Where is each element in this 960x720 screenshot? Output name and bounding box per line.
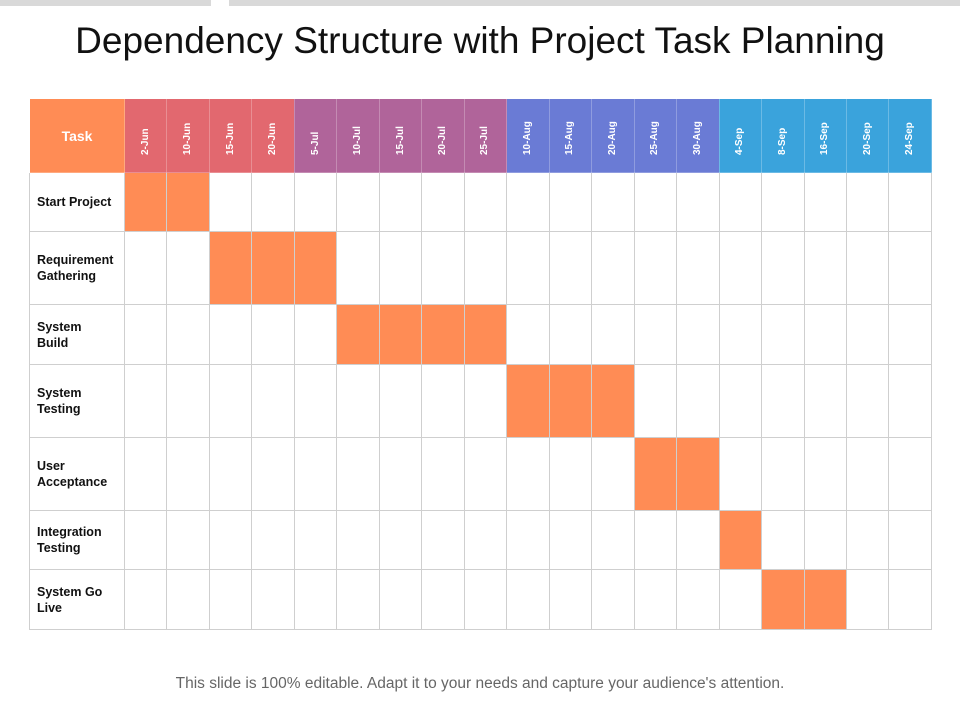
top bar right xyxy=(229,0,960,6)
gantt table: 30-Aug xyxy=(692,121,703,155)
top bar left xyxy=(0,0,211,6)
gantt table: 15-Jun xyxy=(225,123,236,155)
gantt table: Acceptance xyxy=(37,475,107,489)
gantt table: Task xyxy=(62,128,92,144)
gantt table: 20-Sep xyxy=(862,122,873,155)
gantt table: System xyxy=(37,320,81,334)
gantt table: 10-Jul xyxy=(352,126,363,155)
gantt table: 4-Sep xyxy=(734,128,745,155)
gantt table: Testing xyxy=(37,402,81,416)
gantt table: System Go xyxy=(37,584,102,598)
gantt table: 15-Aug xyxy=(564,121,575,155)
gantt table: 15-Jul xyxy=(395,126,406,155)
gantt table: Start Project xyxy=(37,195,111,209)
gantt table: Gathering xyxy=(37,269,96,283)
gantt table: 24-Sep xyxy=(904,122,915,155)
gantt table: 25-Jul xyxy=(479,126,490,155)
gantt table: System xyxy=(37,386,81,400)
gantt table: 20-Aug xyxy=(607,121,618,155)
gantt table: 16-Sep xyxy=(819,122,830,155)
gantt table: 8-Sep xyxy=(777,128,788,155)
gantt table: Live xyxy=(37,600,62,614)
gantt table: 5-Jul xyxy=(310,132,321,155)
footer note: This slide is 100% editable. Adapt it to your needs and capture your audience's attention. xyxy=(176,675,784,692)
gantt table: 2-Jun xyxy=(140,128,151,155)
gantt table: Integration xyxy=(37,525,102,539)
gantt table: Testing xyxy=(37,541,81,555)
gantt table: 25-Aug xyxy=(649,121,660,155)
gantt table: Requirement xyxy=(37,253,113,267)
gantt table: 20-Jul xyxy=(437,126,448,155)
gantt table: Build xyxy=(37,336,68,350)
gantt table xyxy=(29,99,932,630)
gantt table: 20-Jun xyxy=(267,123,278,155)
gantt table: 10-Aug xyxy=(522,121,533,155)
title: Dependency Structure with Project Task Planning xyxy=(75,20,885,61)
gantt table: 10-Jun xyxy=(182,123,193,155)
gantt table: User xyxy=(37,459,65,473)
